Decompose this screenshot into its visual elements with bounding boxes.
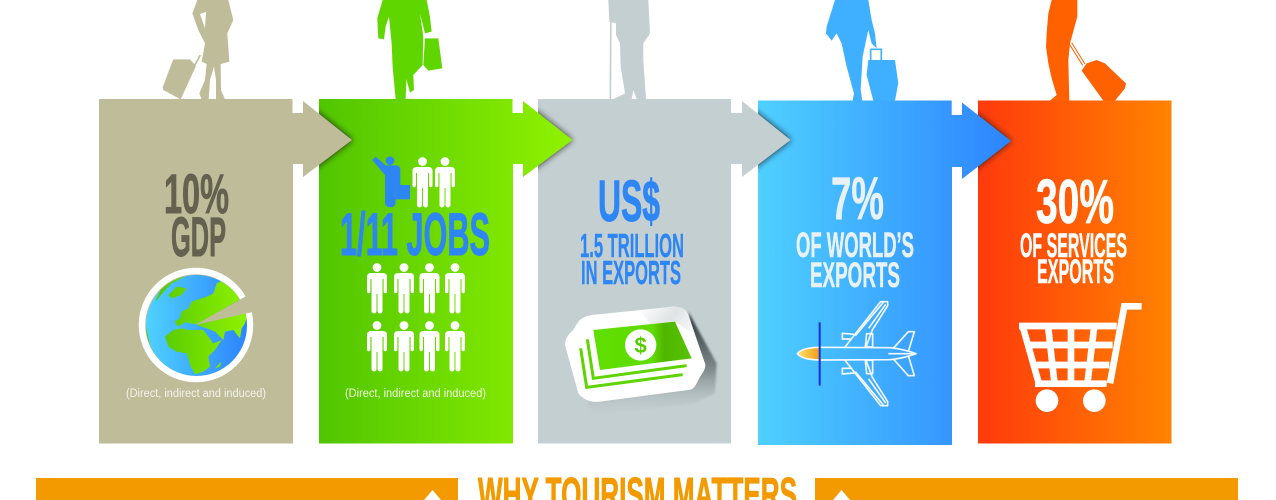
panel: 30% of services exports (978, 0, 1172, 444)
arrow shadow on next panel (758, 107, 794, 172)
icons: white people, top row (412, 157, 455, 208)
caption: (Direct, indirect and induced) (126, 388, 266, 400)
silhouette: hiker with walking pole (608, 0, 650, 100)
text: 1.5 trillion: 1.5 TRILLION (580, 227, 684, 264)
icon: airplane (797, 302, 916, 406)
silhouette: woman with suitcase (163, 0, 233, 99)
icon: pointing person with briefcase (372, 156, 410, 207)
icon: banknotes sticker (565, 307, 717, 415)
stat: 30%: 30% (1036, 168, 1114, 237)
arrow shadow on next panel (538, 106, 575, 172)
silhouette: woman with blue suitcase (826, 0, 898, 101)
panel: 30% of services exports: EXPORTS (1037, 253, 1114, 291)
banner: right orange bar (815, 478, 1238, 500)
icon: white pointer (833, 490, 850, 500)
panel: 7% of world's exports (758, 0, 1011, 445)
arrow shadow on next panel (978, 108, 1014, 174)
panel: 10% GDP (99, 0, 352, 444)
icons: people rows (367, 263, 465, 372)
stat: 7%: 7% (831, 165, 884, 232)
arrow shadow on next panel (319, 107, 355, 172)
icon: shopping cart (1019, 306, 1142, 412)
icon: globe (142, 271, 257, 379)
panel: 30% of services exports: OF SERVICES (1020, 227, 1127, 265)
banner: left orange bar (36, 478, 458, 500)
text: in exports: IN EXPORTS (581, 254, 681, 291)
silhouette: traveller with orange suitcase (1046, 0, 1126, 101)
panel: US$ 1.5 trillion in exports (538, 0, 790, 444)
stat: 1/11 jobs: 1/11 JOBS (340, 201, 490, 268)
text: of world's: OF WORLD’S (796, 226, 914, 265)
panel: 1/11 jobs (319, 0, 572, 444)
text: exports: EXPORTS (810, 256, 900, 295)
stat: 10%: 10% (164, 162, 229, 225)
silhouette: man with bag (377, 0, 442, 99)
caption: (Direct, indirect and induced) (345, 388, 486, 400)
icon: white pointer (424, 490, 441, 500)
stat: US$: US$ (598, 169, 660, 234)
panel: 10% GDP: GDP (171, 205, 226, 268)
text: dollar sign: $ (635, 333, 647, 358)
